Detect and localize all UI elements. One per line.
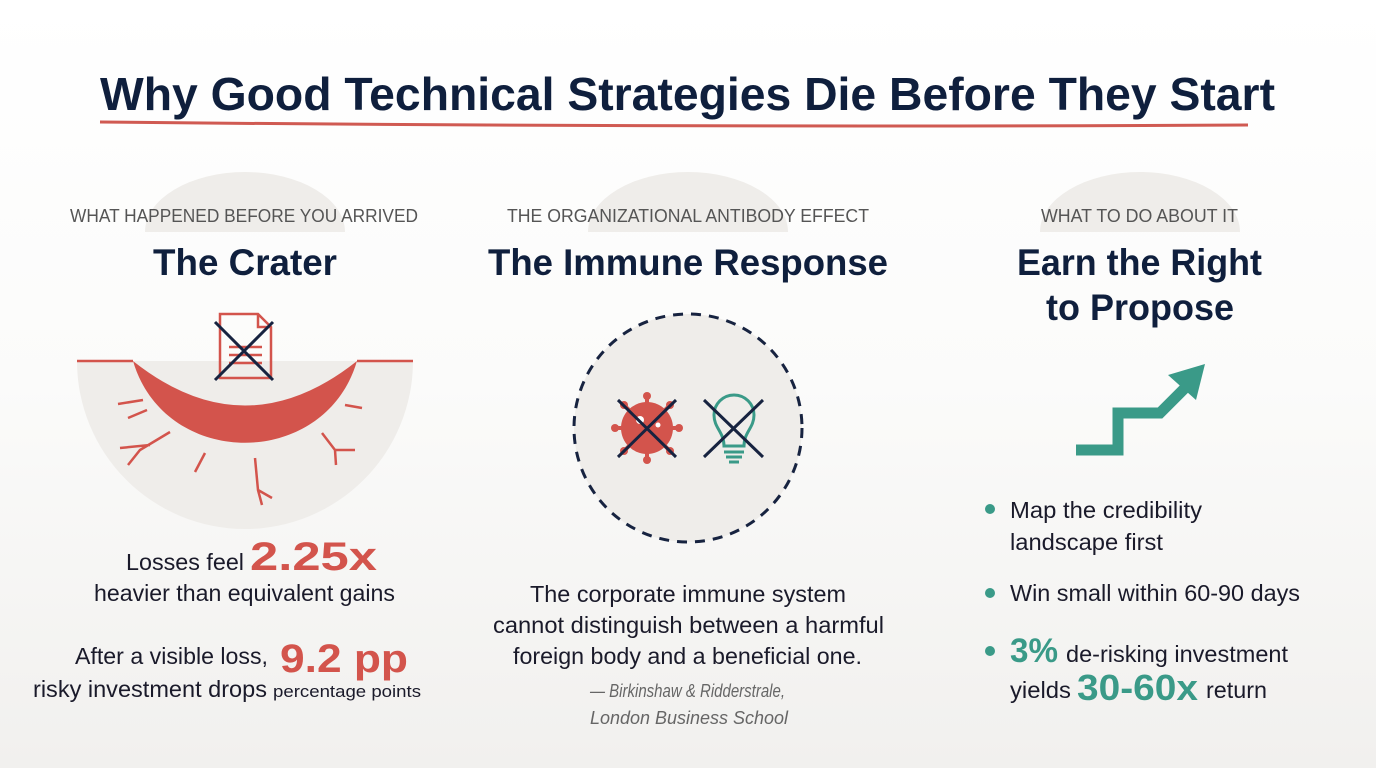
heading: The Crater: The Crater bbox=[153, 242, 337, 283]
bullet list: Map the credibility bbox=[1010, 497, 1203, 523]
bullet list: Win small within 60-90 days bbox=[1010, 580, 1300, 606]
bullet list: 30-60x bbox=[1077, 667, 1198, 708]
stat: risky investment bbox=[33, 637, 421, 702]
heading: Earn the Right to Propose: to Propose bbox=[1046, 287, 1234, 328]
stat: risky investment: risky investment drops bbox=[33, 676, 267, 702]
heading: Earn the Right to Propose bbox=[1017, 242, 1262, 328]
bullet list: return bbox=[1206, 677, 1267, 703]
icon: crossed document bbox=[215, 314, 273, 380]
panel: earn the right bbox=[985, 172, 1300, 708]
text: immune quote: cannot distinguish between a harmful bbox=[493, 612, 884, 638]
icon: crater bbox=[77, 361, 413, 529]
text: attribution: London Business School bbox=[590, 708, 789, 728]
stat: losses: Losses feel bbox=[126, 549, 244, 575]
text: attribution: — Birkinshaw & Ridderstrale, bbox=[589, 681, 785, 701]
icon: crossed virus bbox=[611, 392, 683, 464]
bullet list bbox=[985, 497, 1300, 708]
heading: Earn the Right to Propose: Earn the Right bbox=[1017, 242, 1262, 283]
stat: risky investment: 9.2 pp bbox=[280, 637, 408, 681]
icon: stair arrow bbox=[1076, 364, 1205, 450]
text: immune quote bbox=[493, 581, 884, 669]
text: immune quote: The corporate immune system bbox=[530, 581, 846, 607]
panel: the crater bbox=[33, 172, 421, 702]
heading: The Immune Response: The Immune Response bbox=[488, 242, 888, 283]
bullet list: de-risking investment bbox=[1066, 641, 1289, 667]
stat: risky investment: After a visible loss, bbox=[75, 643, 268, 669]
bullet list: yields bbox=[1010, 677, 1071, 703]
heading: what to do subtitle: WHAT TO DO ABOUT IT bbox=[1041, 206, 1238, 226]
text: attribution bbox=[589, 681, 789, 728]
stat: losses: 2.25x bbox=[250, 535, 377, 579]
bullet list: 3% bbox=[1010, 632, 1058, 670]
title: Why Good Technical Strategies Die Before They Start bbox=[100, 68, 1275, 120]
stat: losses bbox=[94, 535, 395, 606]
text: immune quote: foreign body and a beneficial one. bbox=[513, 643, 862, 669]
stat: risky investment: percentage points bbox=[273, 682, 421, 701]
icon: dashed circle bbox=[574, 314, 802, 542]
heading: crater subtitle: WHAT HAPPENED BEFORE YOU ARRIVED bbox=[70, 206, 418, 226]
stat: losses: heavier than equivalent gains bbox=[94, 580, 395, 606]
icon: crossed lightbulb bbox=[704, 395, 763, 462]
panel: immune response bbox=[488, 172, 888, 728]
heading: immune subtitle: THE ORGANIZATIONAL ANTIBODY EFFECT bbox=[507, 206, 869, 226]
bullet list: landscape first bbox=[1010, 529, 1164, 555]
